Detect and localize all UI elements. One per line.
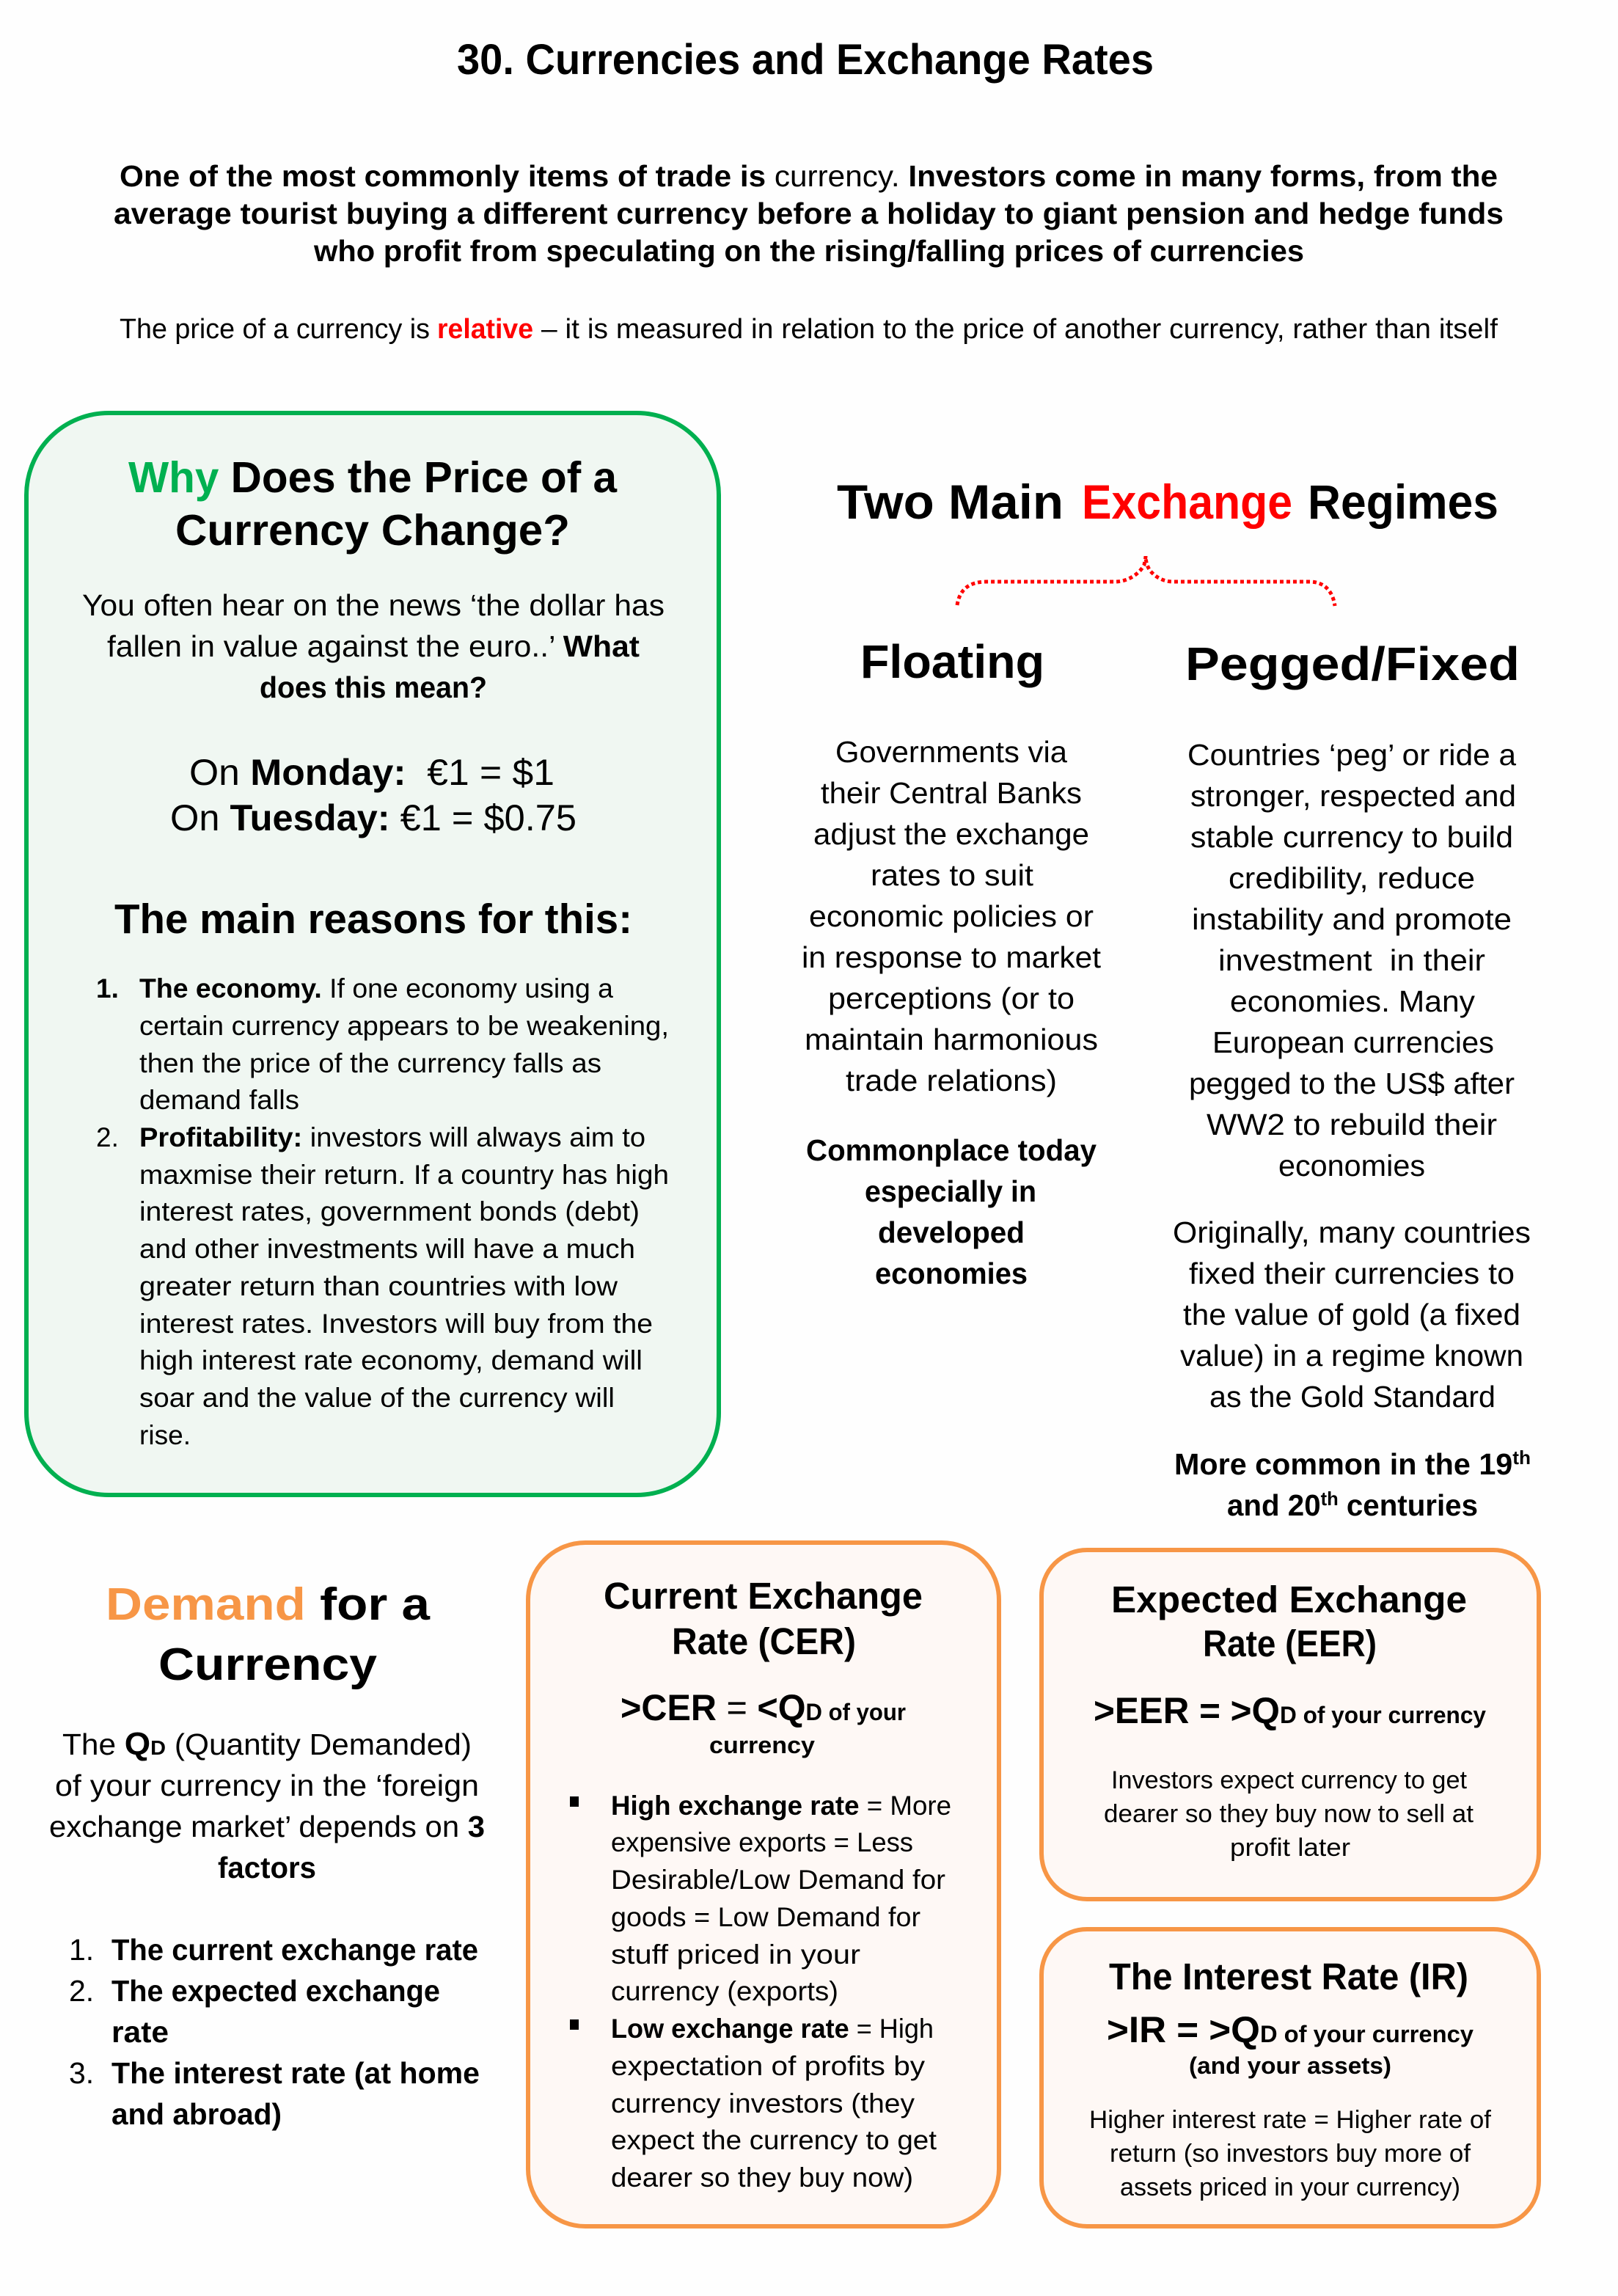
factors list: rate — [111, 2015, 169, 2049]
CER bullets: dearer so they buy now) — [611, 2162, 913, 2193]
news question: You often hear on the news ‘the dollar has — [82, 588, 665, 622]
panel heading: Currency Change? — [175, 506, 570, 555]
CER heading — [604, 1575, 923, 1662]
factors list: 3. — [69, 2056, 94, 2090]
pegged description: credibility, reduce — [1229, 861, 1475, 895]
IR description: assets priced in your currency) — [1120, 2173, 1460, 2201]
floating description: maintain harmonious — [805, 1023, 1098, 1056]
heading: two main exchange regimes: Two Main — [837, 475, 1064, 529]
pegged description: instability and promote — [1192, 902, 1512, 936]
panel: current exchange rate — [528, 1543, 999, 2226]
relative price statement: – it is measured in relation to the price of another currency, rather than itself — [541, 314, 1498, 345]
relative price statement: The price of a currency is — [120, 314, 430, 345]
factors list: The current exchange rate — [111, 1933, 478, 1967]
relative price statement — [120, 314, 1498, 345]
CER formula: >CER = <QD of your — [621, 1687, 906, 1728]
heading: two main exchange regimes: Regimes — [1308, 475, 1498, 529]
reasons list: then the price of the currency falls as — [139, 1048, 601, 1078]
gold standard text — [1173, 1215, 1531, 1414]
CER bullets: Low exchange rate = High — [611, 2014, 934, 2044]
pegged description: stable currency to build — [1190, 820, 1513, 854]
floating note: economies — [875, 1257, 1028, 1290]
CER bullets: High exchange rate = More — [611, 1791, 951, 1821]
section: demand for a currency — [49, 1579, 485, 2131]
factors list: 2. — [69, 1974, 94, 2008]
demand heading — [106, 1579, 431, 1690]
pegged description: Countries ‘peg’ or ride a — [1187, 738, 1516, 772]
factors list: The interest rate (at home — [111, 2056, 480, 2090]
pegged description: WW2 to rebuild their — [1207, 1108, 1497, 1141]
pegged note — [1174, 1447, 1531, 1522]
floating description: economic policies or — [809, 899, 1094, 933]
IR formula: >IR = >QD of your currency — [1107, 2009, 1474, 2050]
reasons heading: The main reasons for this: — [114, 896, 632, 943]
IR formula — [1107, 2009, 1474, 2079]
CER bullets: currency (exports) — [611, 1976, 838, 2006]
floating note: Commonplace today — [806, 1133, 1097, 1167]
pegged description: pegged to the US$ after — [1189, 1067, 1515, 1100]
news question — [82, 588, 665, 704]
demand heading: Demand for a — [106, 1579, 431, 1630]
CER heading: Rate (CER) — [672, 1620, 856, 1662]
exchange example: On Tuesday: €1 = $0.75 — [170, 797, 576, 838]
gold standard text: Originally, many countries — [1173, 1215, 1531, 1249]
pegged note: More common in the 19 — [1174, 1447, 1510, 1481]
demand description: The QD (Quantity Demanded) — [62, 1726, 472, 1762]
reasons list: interest rates, government bonds (debt) — [139, 1196, 640, 1226]
reasons list: 1. — [96, 973, 119, 1003]
IR heading: The Interest Rate (IR) — [1109, 1956, 1468, 1997]
pegged description: economies. Many — [1230, 984, 1476, 1018]
factors list: 1. — [69, 1933, 94, 1967]
pegged description — [1187, 738, 1516, 1182]
floating description: trade relations) — [846, 1064, 1057, 1097]
reasons list: interest rates. Investors will buy from the — [139, 1309, 653, 1339]
news question: does this mean? — [260, 670, 487, 704]
floating description: rates to suit — [871, 858, 1034, 892]
gold standard text: the value of gold (a fixed — [1183, 1298, 1520, 1331]
IR description: return (so investors buy more of — [1110, 2140, 1471, 2168]
IR description — [1089, 2106, 1492, 2201]
demand description: of your currency in the ‘foreign — [55, 1769, 479, 1802]
EER description — [1104, 1766, 1474, 1862]
panel: expected exchange rate — [1042, 1550, 1539, 1899]
CER bullets: Desirable/Low Demand for — [611, 1865, 945, 1895]
reasons list — [96, 973, 669, 1450]
IR formula: (and your assets) — [1189, 2052, 1391, 2079]
reasons list: soar and the value of the currency will — [139, 1383, 615, 1413]
reasons list: The economy. If one economy using a — [139, 973, 613, 1003]
EER heading: Rate (EER) — [1203, 1623, 1377, 1664]
floating note — [806, 1133, 1097, 1290]
intro text block: average tourist buying a different currency before a holiday to giant pension and hedge funds — [114, 197, 1504, 230]
pegged note: centuries — [1339, 1488, 1478, 1522]
CER bullets: goods = Low Demand for — [611, 1902, 920, 1932]
floating note: developed — [878, 1215, 1025, 1249]
relative price statement: relative — [437, 314, 533, 345]
CER formula — [621, 1687, 906, 1758]
intro text block — [114, 159, 1504, 268]
pegged description: investment in their — [1218, 943, 1485, 977]
reasons list: rise. — [139, 1420, 191, 1450]
floating heading: Floating — [860, 635, 1044, 688]
column: floating regime — [802, 635, 1102, 1290]
intro text block: who profit from speculating on the rising/falling prices of currencies — [313, 234, 1304, 268]
pegged heading: Pegged/Fixed — [1185, 637, 1520, 690]
EER heading: Expected Exchange — [1111, 1579, 1467, 1620]
panel heading: Why Does the Price of a — [128, 453, 618, 502]
factors list: The expected exchange — [111, 1974, 440, 2008]
reasons list: maxmise their return. If a country has high — [139, 1160, 669, 1190]
pegged description: stronger, respected and — [1190, 779, 1516, 813]
heading: two main exchange regimes — [837, 475, 1498, 529]
floating description — [802, 735, 1102, 1097]
panel: why does the price change — [26, 413, 719, 1495]
column: pegged regime — [1173, 637, 1531, 1522]
CER bullets: stuff priced in your — [611, 1939, 860, 1970]
EER description: dearer so they buy now to sell at — [1104, 1800, 1474, 1828]
exchange example: On Monday: €1 = $1 — [189, 752, 554, 793]
reasons list: demand falls — [139, 1085, 299, 1115]
title: 30. Currencies and Exchange Rates — [457, 36, 1154, 84]
EER heading — [1111, 1579, 1467, 1664]
CER heading: Current Exchange — [604, 1575, 923, 1617]
pegged description: European currencies — [1212, 1025, 1494, 1059]
floating description: adjust the exchange — [813, 817, 1089, 851]
exchange example — [170, 752, 576, 838]
intro text block: One of the most commonly items of trade is currency. Investors come in many forms, from the — [120, 159, 1498, 193]
reasons list: 2. — [96, 1122, 119, 1152]
floating description: Governments via — [835, 735, 1067, 769]
pegged note: and 20 — [1227, 1488, 1322, 1522]
floating description: perceptions (or to — [828, 981, 1075, 1015]
reasons list: and other investments will have a much — [139, 1234, 635, 1264]
EER description: profit later — [1230, 1834, 1350, 1862]
pegged note: th — [1512, 1447, 1531, 1469]
factors list: and abroad) — [111, 2097, 282, 2131]
heading: two main exchange regimes: Exchange — [1082, 475, 1292, 529]
demand description — [49, 1726, 485, 1884]
news question: fallen in value against the euro..’ What — [107, 629, 640, 663]
floating note: especially in — [865, 1174, 1036, 1208]
panel heading — [128, 453, 618, 555]
pegged description: economies — [1278, 1149, 1425, 1182]
gold standard text: as the Gold Standard — [1209, 1380, 1496, 1414]
demand description: exchange market’ depends on 3 — [49, 1810, 485, 1843]
demand heading: Currency — [158, 1639, 378, 1690]
icon: dotted brace — [957, 556, 1335, 606]
EER description: Investors expect currency to get — [1111, 1766, 1468, 1794]
demand description: factors — [218, 1851, 316, 1884]
reasons list: Profitability: investors will always aim to — [139, 1122, 645, 1152]
CER bullets: expect the currency to get — [611, 2125, 937, 2155]
CER formula: currency — [709, 1732, 815, 1758]
CER bullets: expensive exports = Less — [611, 1827, 913, 1857]
floating description: their Central Banks — [821, 776, 1082, 810]
pegged note: th — [1321, 1488, 1339, 1510]
IR description: Higher interest rate = Higher rate of — [1089, 2106, 1492, 2134]
panel: interest rate — [1042, 1929, 1539, 2226]
CER bullets: currency investors (they — [611, 2088, 915, 2118]
factors list — [69, 1933, 480, 2131]
CER bullets — [570, 1791, 951, 2193]
reasons list: high interest rate economy, demand will — [139, 1345, 643, 1375]
gold standard text: value) in a regime known — [1180, 1339, 1523, 1372]
reasons list: greater return than countries with low — [139, 1271, 618, 1301]
EER formula: >EER = >QD of your currency — [1094, 1690, 1486, 1731]
gold standard text: fixed their currencies to — [1189, 1257, 1515, 1290]
CER bullets: expectation of profits by — [611, 2051, 926, 2081]
floating description: in response to market — [802, 940, 1102, 974]
reasons list: certain currency appears to be weakening, — [139, 1011, 669, 1041]
